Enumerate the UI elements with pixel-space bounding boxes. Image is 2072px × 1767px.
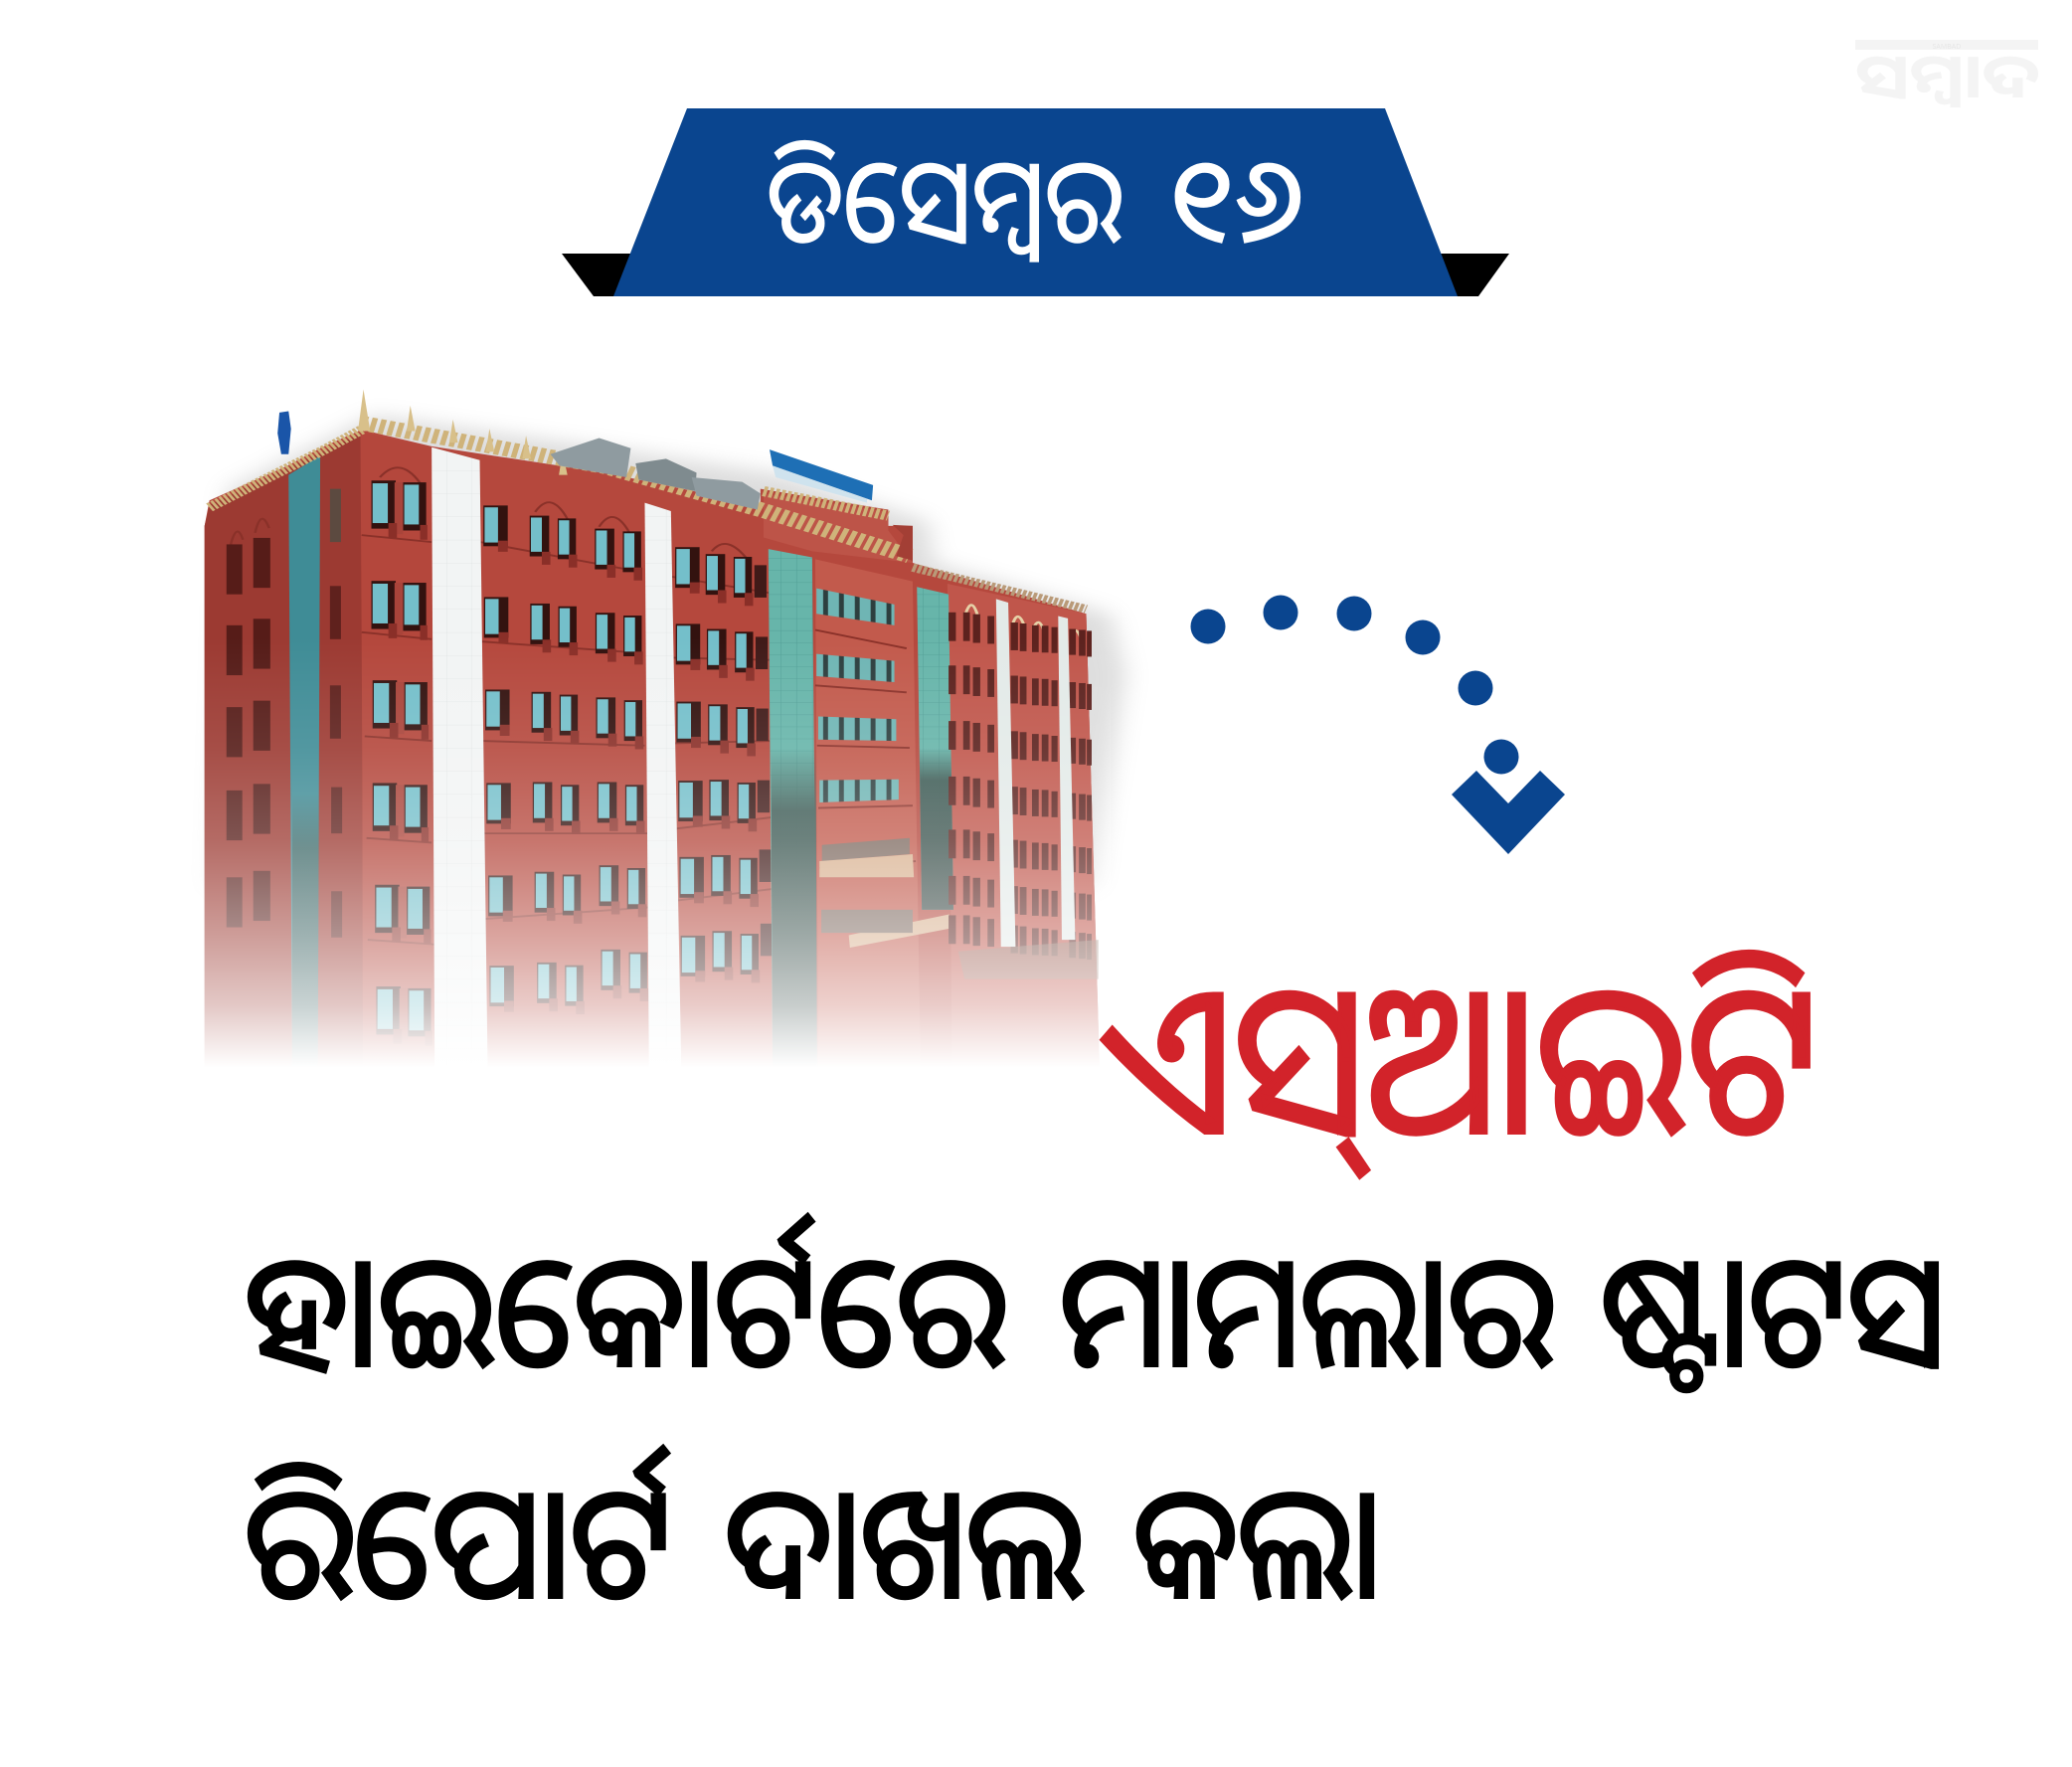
headline line 2	[245, 1431, 1381, 1643]
headline line 2: କଲା	[1133, 1431, 1381, 1643]
watermark logo: ସମ୍ବାଦ	[1855, 33, 2040, 116]
date banner	[562, 108, 1509, 296]
headline line 1: ହାଇକୋର୍ଟରେ	[245, 1199, 1006, 1411]
headline line 1: ମାମଲାର	[1060, 1199, 1554, 1411]
headline line 1: ଷ୍ଟାଟସ	[1601, 1199, 1946, 1411]
dotted arc	[1191, 595, 1519, 774]
headline line 2: ଦାଖଲ	[725, 1431, 1085, 1643]
building photo	[179, 390, 1125, 1081]
banner date text: ୧୬	[1167, 116, 1302, 276]
arrow head	[1452, 771, 1565, 854]
headline line 2: ରିପୋର୍ଟ	[245, 1431, 673, 1643]
headline line 1	[245, 1199, 1946, 1411]
red heading: ଏସ୍‌ଆଇଟି	[1101, 908, 1820, 1195]
watermark logo: SAMBAD	[1933, 43, 1961, 52]
banner date text: ଡିସେମ୍ବର	[767, 116, 1122, 276]
